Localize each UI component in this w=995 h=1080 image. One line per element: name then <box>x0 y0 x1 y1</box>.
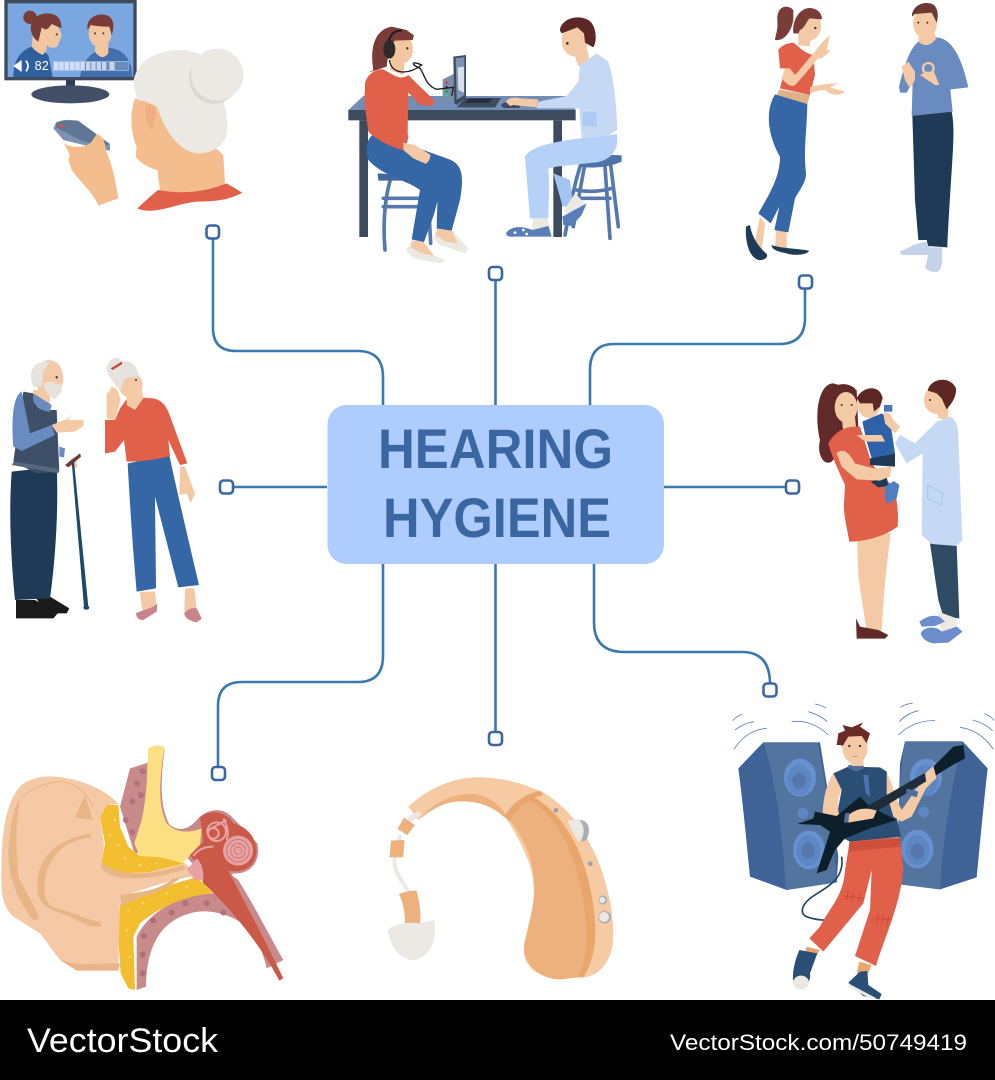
volume number: 82 <box>35 59 49 73</box>
footer bar: VectorStock <box>27 1022 219 1060</box>
sound waves <box>733 703 994 749</box>
illustration: behind-the-ear hearing aid <box>388 777 613 979</box>
central title box: HYGIENE <box>383 486 611 549</box>
illustration: elderly woman watching loud TV <box>4 0 243 211</box>
illustration: rock guitarist with speakers <box>733 703 994 999</box>
illustration: hearing test at desk <box>348 17 622 263</box>
man <box>553 173 573 207</box>
central title box: HEARING <box>378 417 613 480</box>
guitar <box>797 797 897 873</box>
illustration: woman and man using sign language <box>746 3 968 272</box>
central title box <box>328 405 664 564</box>
table <box>348 96 576 110</box>
connector nodes <box>206 226 812 780</box>
illustration: elderly couple, woman cupping ear <box>10 358 202 622</box>
illustration: ear anatomy cross-section <box>1 746 283 990</box>
footer bar: VectorStock.com/50749419 <box>670 1030 967 1055</box>
woman <box>406 240 445 263</box>
guitarist <box>803 947 820 960</box>
connector lines <box>213 238 805 767</box>
stools <box>383 163 618 250</box>
speakers <box>738 742 838 890</box>
illustration: doctor examining child's ear <box>817 380 963 643</box>
footer bar <box>0 1000 995 1080</box>
